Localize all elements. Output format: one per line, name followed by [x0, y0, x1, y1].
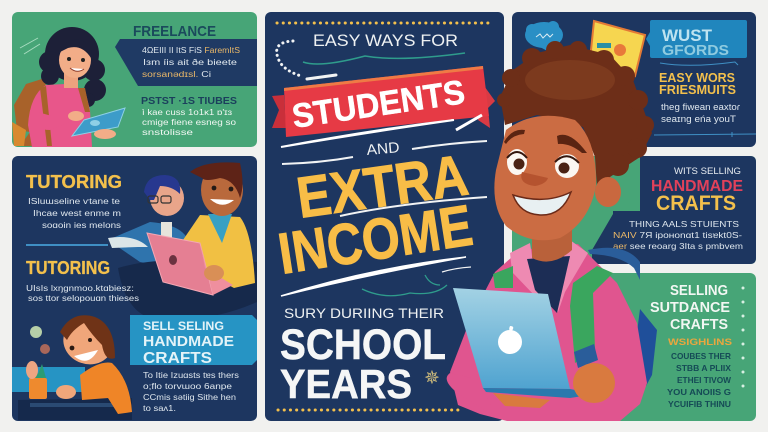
- icon: stars: ✵: [424, 368, 440, 389]
- text block: crafts: to saʌ1.: [143, 404, 176, 413]
- text block: tutoring 2: [26, 284, 139, 303]
- banner: wust gfords: WUST: [662, 26, 713, 45]
- heading: post tubes: PSTST ·1S TIUBES: [141, 96, 237, 107]
- text block: STBB A PLIIX: [676, 363, 731, 373]
- panel: freelance: [12, 12, 257, 147]
- heading: easy wors: EASY WORS: [659, 70, 735, 85]
- panel: centre title: [265, 12, 504, 421]
- callout: freelance text: Iзm íis ait ðe bieete: [143, 58, 238, 67]
- heading: freelance: FREELANCE: [133, 23, 216, 40]
- heading: years: YEARS: [280, 361, 412, 407]
- heading: extra: EXTRA: [293, 143, 472, 231]
- heading: SUTDANCE: [650, 300, 730, 316]
- heading: handmade: HANDMADE: [651, 178, 743, 195]
- text block: [667, 351, 732, 409]
- text block: YCUIFIB THINU: [668, 399, 731, 409]
- text block: post tubes: cmige fiene esneg so: [142, 118, 237, 127]
- text block: tutoring 1: soɑoin ies melons: [42, 221, 121, 230]
- text block: post tubes: snstolissе: [142, 128, 194, 137]
- heading: school: SCHOOL: [280, 321, 446, 369]
- text block: theg fiwean eaxtoɾ: [661, 102, 740, 112]
- panel: top right: [512, 12, 756, 147]
- text block: [661, 102, 740, 124]
- text block: tutoring 2: sos ttor selopouɑn thieses: [28, 294, 139, 303]
- text block: seaɪng eńa youT: [661, 114, 737, 124]
- dotted arc: [277, 41, 301, 76]
- icon: yellow card: [590, 21, 645, 76]
- ribbon: students: STUDENTS: [290, 73, 467, 136]
- swoosh between extra and income: [340, 197, 487, 216]
- swoosh under income: [281, 257, 466, 296]
- backpack: [588, 248, 657, 386]
- hair: [497, 41, 654, 188]
- illustration: two students with laptop: [108, 162, 257, 320]
- callout: freelance text: 4ΩEIII II ItS FiS FaremItS: [142, 46, 240, 55]
- banner: wust gfords: [646, 20, 747, 59]
- banner: sell handmade crafts: HANDMADE: [143, 333, 234, 350]
- text: during their: SURY DURIING THEIR: [284, 305, 444, 321]
- callout: freelance text: [115, 39, 257, 86]
- panel: handmade crafts: [512, 156, 756, 264]
- banner: sell handmade crafts: SELL SELING: [143, 319, 224, 333]
- icon: apple logo: [498, 326, 522, 354]
- banner: wust gfords: GFORDS: [662, 42, 729, 59]
- top dotted border: [277, 22, 490, 24]
- heading: easy ways for: EASY WAYS FOR: [313, 31, 458, 50]
- heading: [650, 283, 730, 333]
- text block: YOU ANOIIS G: [667, 387, 731, 397]
- banner: sell handmade crafts: [130, 315, 257, 367]
- swooshes: [281, 120, 454, 147]
- panel: tutoring and crafts: [12, 156, 257, 421]
- flourish bottom: [362, 275, 447, 296]
- face: [494, 116, 596, 240]
- illustration: child crafting: [12, 313, 132, 420]
- eyes: [507, 149, 579, 178]
- text block: crafts: CCmis sətiig Sithe hen: [143, 393, 236, 402]
- text block: tutoring 1: [28, 197, 121, 230]
- hand: [573, 363, 615, 403]
- heading: income: INCOME: [274, 193, 477, 287]
- text block: aer see reoarg 3Ita s pmbvem: [613, 241, 743, 251]
- heading: tutoring 2: TUTORING: [26, 258, 110, 278]
- text block: crafts: To Itie Izuɑsts tɐs thers: [143, 371, 239, 380]
- text block: tutoring 1: ISluɯseline ⱱtane te: [28, 197, 121, 206]
- heading: CRAFTS: [670, 317, 728, 333]
- jacket: [450, 244, 647, 421]
- text block: tutoring 2: UIsIs lxŋgnmoo.ktɑbiesz:: [26, 284, 134, 293]
- text block: THING AALS STUIENTS: [629, 219, 739, 229]
- text block: crafts: [143, 371, 239, 413]
- text: and: AND: [366, 139, 400, 159]
- callout: freelance text: sorsanədɪsl. Ci: [142, 70, 211, 79]
- dotted column: [742, 286, 744, 388]
- flourish top: [303, 53, 465, 64]
- text block: post tubes: ì kae cuss 1ᴏ1ᴋ1 ɒ'ɪɜ: [142, 108, 232, 117]
- eyebrows: [504, 130, 525, 144]
- heading: crafts: CRAFTS: [656, 192, 736, 215]
- ear: [595, 177, 621, 207]
- neck: [532, 225, 572, 262]
- text block: crafts: o;flo torvɯoo 6anpe: [143, 382, 233, 391]
- text block: post tubes: [142, 108, 237, 137]
- bottom dotted border: [278, 408, 460, 412]
- green straps: [493, 266, 613, 363]
- text block: ETHEI TIVOW: [677, 375, 732, 385]
- text block: tutoring 1: Ihcae west enme m: [33, 209, 121, 218]
- nose: [521, 172, 548, 186]
- heading: easy wors: [659, 70, 736, 97]
- heading: easy wors: FRIESMUITS: [659, 82, 736, 97]
- illustration: girl with tablet: [12, 27, 125, 147]
- heading: tutoring 1: TUTORING: [26, 172, 122, 192]
- banner: sell handmade crafts: CRAFTS: [143, 350, 212, 367]
- text: wits selling: WITS SELLING: [674, 166, 741, 177]
- laptop: [447, 288, 615, 416]
- text block: [613, 219, 743, 251]
- icon: speech cloud: [525, 21, 563, 53]
- mouth: [513, 192, 571, 215]
- text block: COUBES THER: [671, 351, 731, 361]
- panel: selling crafts: [600, 273, 756, 421]
- subheading: WSIGHLINS: [668, 337, 732, 347]
- text block: NAIV 7Я ipoʜonɑt1 tisɐkt0S-: [613, 230, 742, 240]
- heading: SELLING: [670, 283, 728, 299]
- illustration: boy with laptop: [447, 41, 657, 421]
